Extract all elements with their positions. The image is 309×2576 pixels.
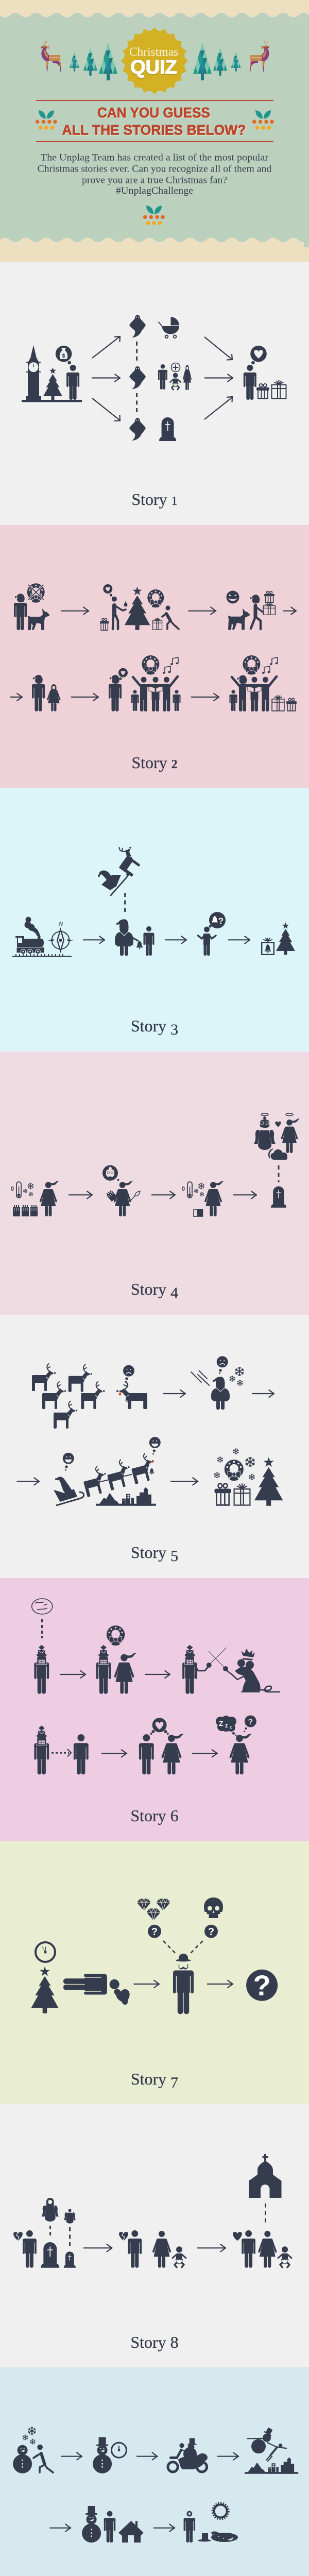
heading: can you guess [62, 105, 246, 138]
panel: story 9 [0, 2367, 309, 2576]
arrow [252, 1390, 274, 1397]
icon: couple in love [139, 1718, 184, 1774]
label: story 8: Story 8 [130, 2333, 179, 2351]
panel: story 5 [0, 1315, 309, 1578]
icon: gems and question [137, 1899, 170, 1938]
arrow [145, 1670, 170, 1679]
icon: boy and melted snowman under the sun [184, 2503, 238, 2543]
panel: story 8 [0, 2104, 309, 2367]
arrow [136, 2452, 157, 2460]
divider: top red rule [36, 100, 273, 101]
icon: grinch with heart and singing villagers [109, 655, 180, 711]
arrow [191, 693, 219, 701]
icon: santa giving bell to boy [115, 919, 154, 956]
icon: girl in the cold with empty box [182, 1181, 224, 1217]
icon: ghost of present [129, 366, 146, 389]
label: story 7: 7 [170, 2074, 178, 2091]
panel: story 4 [0, 1052, 309, 1315]
icon: sad santa in snowstorm [191, 1356, 244, 1410]
panel: story 1 [0, 262, 309, 525]
icon: left trees [70, 43, 117, 80]
text: introduction: Christmas stories ever. Can you recognize all of them and [38, 164, 272, 174]
icon: skull and question: ? [208, 1926, 214, 1938]
label: story 4: 4 [170, 1284, 178, 1301]
text: introduction [38, 152, 272, 196]
icon: ghost of past [129, 315, 146, 337]
icon: child building a snowman [13, 2427, 53, 2473]
icon: grieving man at graves with angels [13, 2198, 76, 2268]
icon: snowman, boy and house [82, 2506, 144, 2543]
arrow [151, 1191, 175, 1199]
icon: healed family [233, 2230, 291, 2268]
icon: clara wakes, was it a dream? [216, 1716, 256, 1774]
arrow [60, 1670, 85, 1679]
icon: right trees [193, 43, 241, 80]
icon: man meets woman with child [119, 2230, 186, 2268]
panel: story 3 [0, 788, 309, 1052]
icon: clara wakes, was it a dream?: z [230, 1725, 232, 1730]
panel: story 2 [0, 525, 309, 788]
icon: grinch and little girl [32, 675, 61, 711]
arrow: up [92, 336, 120, 358]
icon: flying reindeer and sleigh [98, 842, 145, 895]
icon: murdered man with blood [63, 1974, 130, 2005]
icon: girl with matches thinking of grandmother [102, 1165, 140, 1216]
line: dashed link [41, 1619, 43, 1638]
icon: big question mark: ? [253, 1969, 271, 2002]
icon: nutcracker [34, 1645, 49, 1694]
arrow: converge down [204, 337, 232, 360]
arrow [192, 1750, 217, 1757]
divider: bottom red rule [36, 141, 273, 142]
icon: skull and question [204, 1897, 223, 1938]
icon: puzzled man thinking about the bell [198, 912, 226, 956]
arrow [170, 1478, 198, 1485]
label: story 2: Story 2 [131, 753, 178, 772]
text: introduction: The Unplag Team has created a list of the most popular [41, 152, 269, 163]
arrow [163, 1390, 185, 1397]
arrow [68, 1191, 92, 1199]
badge: Christmas Quiz: Christmas [129, 45, 178, 59]
heading: can you guess: ALL THE STORIES BELOW? [62, 122, 246, 138]
text: introduction: #UnplagChallenge [116, 185, 193, 196]
icon: flying over the city [245, 2427, 298, 2474]
icon: ghost of future [129, 418, 146, 440]
arrow [101, 1750, 127, 1757]
arrow: middle [92, 374, 120, 382]
arrow [207, 1980, 233, 1988]
icon: church [249, 2154, 281, 2198]
line: dashed link [265, 2204, 266, 2224]
line: dashed link [124, 893, 126, 913]
label: story 4: Story [131, 1280, 166, 1298]
line: dashed links to the detective [163, 1940, 203, 1953]
icon: nutcracker turned into a man [34, 1725, 89, 1774]
arrow [83, 2244, 112, 2252]
line: dashed link [278, 1165, 279, 1182]
icon: left ornament [36, 110, 57, 130]
arrow [71, 693, 98, 701]
icon: big ben, tree and scrooge thinking of money [22, 345, 82, 402]
icon: herd of reindeer [32, 1364, 105, 1429]
icon: pram [159, 317, 179, 338]
heading: can you guess: CAN YOU GUESS [97, 105, 210, 121]
icon: christmas wreath, snow, gifts and tree [214, 1448, 283, 1506]
label: story 1: Story 1 [131, 490, 178, 509]
arrow [134, 1980, 159, 1988]
icon: people decorating a tree [100, 584, 179, 630]
arrow [83, 936, 105, 944]
label: story 6: Story 6 [130, 1806, 179, 1825]
icon: puzzled man thinking about the bell: ? [218, 916, 224, 926]
arrow [228, 936, 250, 944]
label: story 5: Story [131, 1543, 166, 1562]
arrow [188, 607, 216, 615]
icon: north compass: N [58, 921, 63, 928]
arrow [283, 607, 296, 615]
arrow [61, 2452, 82, 2460]
text: introduction: prove you are a true Christmas fan? [82, 175, 227, 185]
icon: center ornament [143, 206, 165, 225]
icon: brain thought outline [32, 1599, 53, 1614]
icon: clara wakes, was it a dream?: Z [219, 1719, 224, 1727]
arrow [153, 2524, 175, 2532]
icon: gems and question: ? [151, 1926, 158, 1938]
label: story 3: 3 [170, 1021, 178, 1038]
icon: bell gift and tree [262, 922, 295, 955]
label: story 7: Story [131, 2070, 166, 2088]
icon: steam train [12, 917, 72, 957]
line: dashed links [136, 342, 138, 414]
icon: grinch stealing gifts with dog [227, 590, 275, 630]
icon: big question mark [246, 1969, 278, 2002]
icon: happy man with gifts [244, 346, 286, 400]
icon: sad rudolph [116, 1365, 147, 1409]
arrow: converge middle [204, 374, 233, 382]
icon: clara wakes, was it a dream?: z [225, 1723, 228, 1729]
icon: santa's sleigh led by rudolph over a city [54, 1437, 161, 1506]
icon: family with baby [158, 363, 192, 390]
label: story 3: Story [131, 1016, 166, 1035]
icon: nutcracker with clara and wreath [96, 1625, 136, 1694]
panel: story 6 [0, 1578, 309, 1841]
arrow [16, 1478, 39, 1485]
badge: Christmas Quiz: QUIZ [130, 57, 177, 78]
icon: north compass [47, 921, 74, 953]
icon: celebration with gifts [230, 655, 297, 711]
icon: tombstone [159, 417, 176, 441]
label: story 5: 5 [170, 1548, 178, 1565]
panel: story 7 [0, 1841, 309, 2104]
arrow [49, 2524, 71, 2532]
arrow [197, 2244, 226, 2252]
icon: clara wakes, was it a dream?: ? [248, 1718, 253, 1726]
arrow: down [92, 398, 120, 421]
icon: poirot detective [173, 1954, 194, 2014]
icon: midnight clock above christmas tree [31, 1942, 59, 2013]
icon: right ornament [252, 110, 274, 130]
icon: grandmother and girl as angels on a cloud [254, 1113, 300, 1160]
arrow [10, 693, 22, 701]
arrow [233, 1191, 256, 1199]
icon: grinch, crossed wreath and dog [14, 583, 50, 630]
icon: cold, matchboxes and girl [11, 1181, 59, 1216]
badge: Christmas Quiz [121, 27, 188, 94]
icon: big ben, tree and scrooge thinking of money: $ [62, 353, 65, 359]
icon: nutcracker fighting mouse king [182, 1645, 280, 1694]
icon: right reindeer [250, 41, 269, 72]
icon: snowman at midnight [93, 2437, 127, 2473]
panel: header [0, 0, 309, 262]
icon: tombstone [271, 1187, 286, 1208]
arrow: converge up [204, 397, 232, 419]
arrow [217, 2452, 238, 2460]
icon: snowman and boy on motorbike [168, 2438, 208, 2472]
icon: left reindeer [41, 41, 61, 72]
arrow [61, 607, 89, 615]
arrow [165, 936, 186, 944]
